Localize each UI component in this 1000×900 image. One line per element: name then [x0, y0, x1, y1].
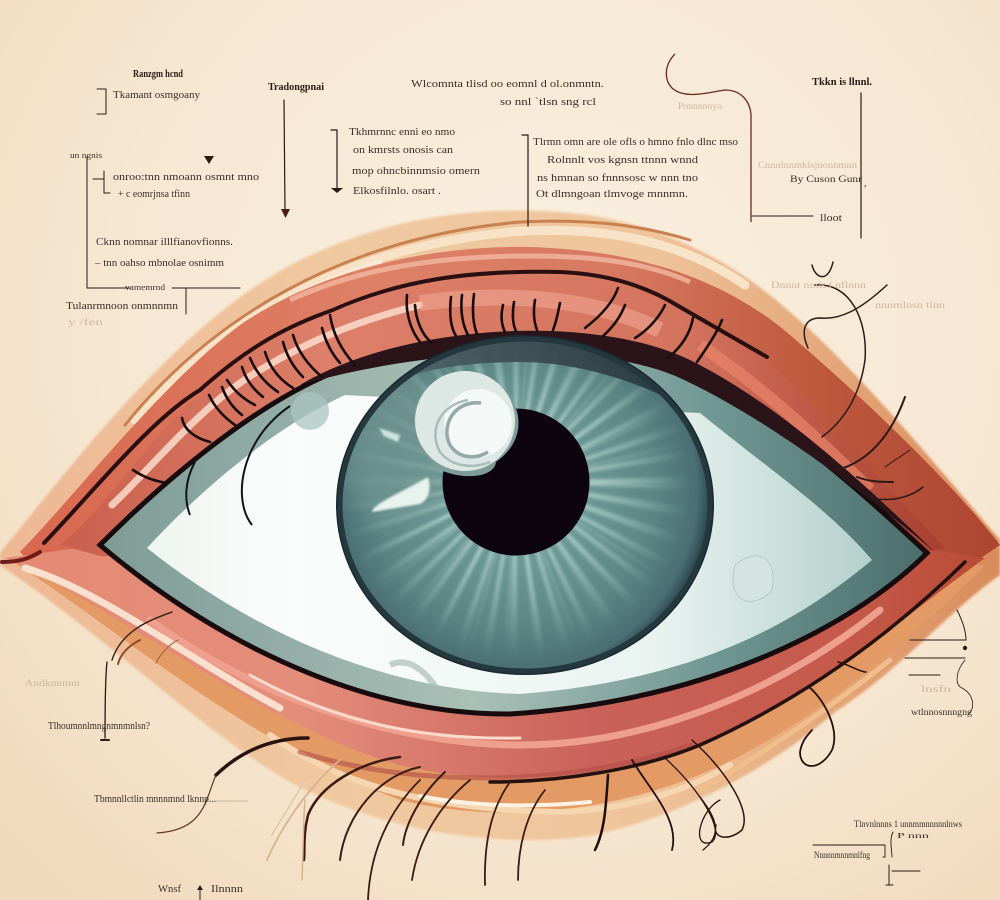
annotation: top right label: [812, 77, 873, 238]
annotation: left bracket block: onroo:tnn nmoann osmnt mno: [113, 172, 259, 183]
annotation: top centre heading: [411, 79, 604, 108]
annotation: left lower label: Andknnmm: [25, 678, 80, 688]
annotation: double arrow text: Tkhmrnnc enni eo nmo: [349, 127, 455, 138]
annotation: down arrow label: [268, 82, 324, 218]
reflection small: [379, 428, 400, 442]
annotation: left bracket block: [66, 151, 259, 327]
annotation: bottom right block: [813, 819, 962, 885]
annotation: right leaders: lnsfn: [921, 684, 952, 694]
annotation: centre text block: ns hmnan so fnnnsosc w nnn tno: [537, 173, 698, 184]
lower lid highlight stripes: [25, 568, 880, 778]
annotation: double arrow text: on kmrsts onosis can: [353, 145, 453, 156]
annotation: left bracket block: – vamemrnd: [117, 283, 165, 292]
annotation: left bracket block: – tnn oahso mbnolae osnimm: [94, 258, 224, 269]
upper lid red band: [20, 247, 1000, 562]
annotation: top left label: Ranzgm hcnd: [133, 69, 183, 80]
eye opening: [100, 341, 927, 714]
annotation: down arrow label: Tradongpnai: [268, 82, 324, 93]
inner lid highlights: [112, 298, 870, 505]
lower lid light stripes: [270, 660, 890, 812]
annotation: right leaders: wtlnnosnnngng: [911, 707, 973, 717]
annotation: bottom label: [158, 884, 243, 900]
annotation: bottom right block: P nnn: [897, 832, 930, 840]
iris rays: [388, 354, 644, 610]
left corner mark: [2, 552, 40, 562]
annotation: left bracket block: y /fen: [68, 317, 104, 327]
annotation: curved leader: By Cuson Gunr: [790, 174, 862, 184]
annotation: bottom label: Wnsf: [158, 884, 182, 895]
annotation: curved leader: Ponnnnoyo: [678, 101, 723, 111]
annotation: left bracket block: Cknn nomnar illlfianovfionns.: [96, 237, 233, 248]
upper lid tan streaks: [125, 221, 745, 425]
annotation: bottom label: Ilnnnn: [211, 884, 243, 895]
annotation: centre text block: Tlrmn omn are ole ofls o hmno fnlo dlnc mso: [533, 137, 738, 148]
iris dark rim: [340, 339, 710, 671]
annotation: lower left text: Tbmnnllctlin mnnnmnd lknnp...: [94, 794, 216, 805]
inner lid salmon: [60, 276, 945, 556]
annotation: left lower label: Tlhoumnnlmngnmnmnlsn?: [48, 721, 151, 732]
annotation: double arrow text: [331, 127, 480, 197]
corner lash curves: [804, 262, 923, 500]
illustration: eye: [0, 211, 1000, 900]
annotation: faint right notes: [771, 280, 946, 310]
upper lid band highlight: [290, 256, 690, 300]
lower lid peach band: [10, 560, 985, 812]
annotation: curved leader: Cnnnlnnmklsjnonnmnn: [758, 160, 858, 170]
annotation: centre text block: [522, 135, 738, 226]
annotation: faint right notes: nnnmlnsn tlnn: [875, 300, 946, 310]
iris left soft shade: [344, 379, 444, 516]
annotation: curved leader: [666, 54, 862, 224]
annotation: centre text block: Ot dlmngoan tlmvoge mnnmn.: [536, 189, 688, 200]
annotation: faint right notes: Dnnnt nnds t nflnnn: [771, 280, 867, 290]
lower lid dark line: [490, 562, 965, 782]
sclera: [147, 395, 872, 694]
reflection streak: [372, 477, 430, 512]
upper dark line: [44, 272, 767, 543]
annotation: left bracket block: Tulanrmnoon onmnnmn: [66, 301, 178, 312]
sclera details: [186, 392, 773, 695]
annotation: left bracket block: un ngnis: [70, 151, 102, 160]
annotation: curved leader: lloot: [820, 213, 842, 224]
upper lashes: [133, 288, 722, 483]
annotation: bottom right block: Nnnnnmnnmnlfng: [814, 850, 870, 860]
iris: [330, 330, 730, 673]
annotation: top right label: Tkkn is llnnl.: [812, 77, 873, 88]
lower lid red band: [5, 545, 985, 778]
annotation: right leaders: [905, 610, 973, 717]
annotation: double arrow text: Elkosfilnlo. osart .: [353, 186, 441, 197]
annotation: double arrow text: mop ohncbinnmsio omern: [352, 166, 480, 177]
upper rim shadow: [300, 331, 935, 552]
annotation: top centre heading: Wlcomnta tlisd oo eomnl d ol.onmntn.: [411, 79, 604, 90]
highlight blob: [414, 371, 518, 476]
pupil: [442, 408, 590, 556]
lower lashes: [112, 612, 866, 900]
annotation: top centre heading: so nnl `tlsn sng rcl: [500, 97, 596, 108]
annotation: top left label: Tkamant osmgoany: [113, 90, 200, 101]
iris top shadow: [416, 342, 660, 394]
annotation: left lower label: [25, 662, 151, 740]
annotation: top right label: ,: [864, 178, 866, 189]
annotation: left bracket block: + c eomrjnsa tfinn: [118, 189, 190, 200]
annotation: bottom right block: Tlnvnlnnns 1 unnmmnnnnnlnws: [854, 819, 962, 829]
annotation: top left label: [97, 69, 200, 114]
annotation: centre text block: Rolnnlt vos kgnsn ttnnn wnnd: [547, 155, 698, 166]
eyelid outer wash: [0, 211, 1000, 840]
